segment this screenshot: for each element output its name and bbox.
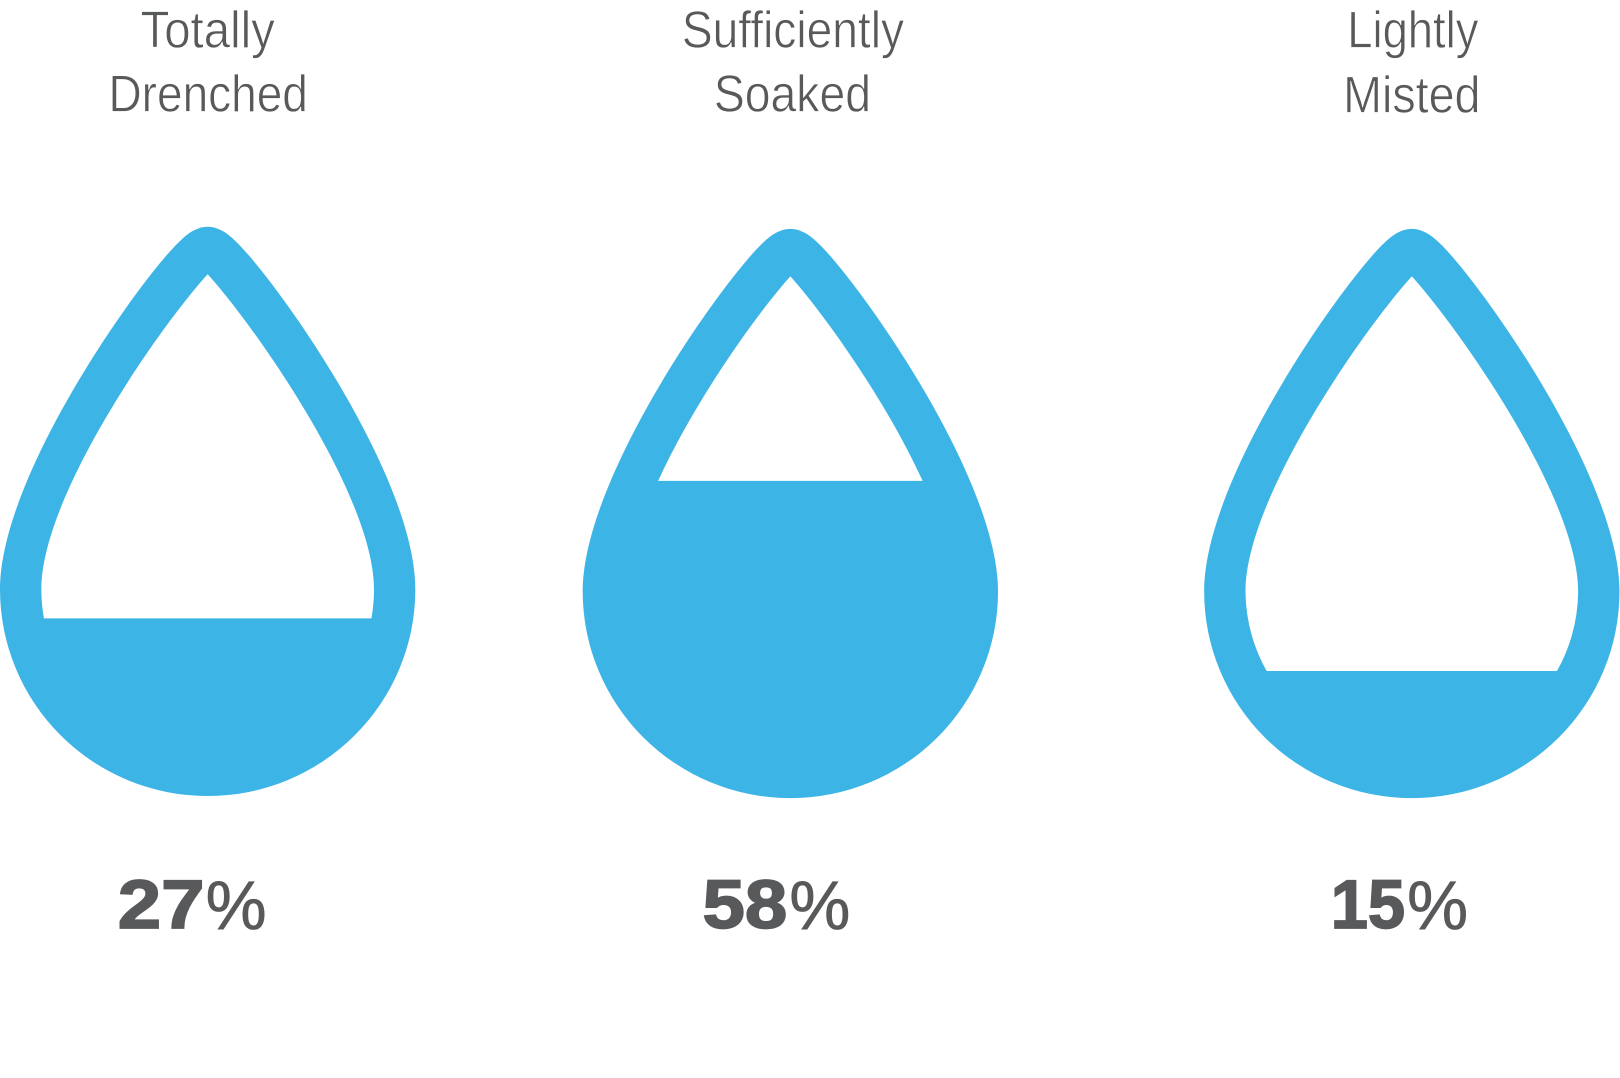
column: lightly misted [1204,1,1619,944]
value: 58% [703,867,850,944]
label: Lightly Misted: Misted [1343,66,1481,124]
label: Totally Drenched: Drenched [108,65,308,123]
column: sufficiently soaked [583,1,998,944]
column: totally drenched [0,1,415,944]
label: Totally Drenched [108,1,308,123]
label: Sufficiently Soaked: Soaked [714,65,871,123]
value: 15%: 15 [1331,867,1405,943]
value: 58%: 58 [703,867,787,943]
label: Lightly Misted [1343,1,1481,124]
label: Sufficiently Soaked: Sufficiently [682,1,904,59]
value: 27% [118,867,267,944]
icon: water drop filled 27% [0,227,415,796]
label: Sufficiently Soaked [682,1,904,123]
icon: water drop filled 15% [1204,229,1619,798]
value: 58%: % [789,868,850,944]
value: 15%: % [1407,868,1468,944]
value: 27%: % [206,868,267,944]
label: Totally Drenched: Totally [141,1,275,59]
value: 27%: 27 [118,867,205,943]
label: Lightly Misted: Lightly [1347,1,1479,59]
value: 15% [1331,867,1468,944]
icon: water drop filled 58% [583,229,998,798]
